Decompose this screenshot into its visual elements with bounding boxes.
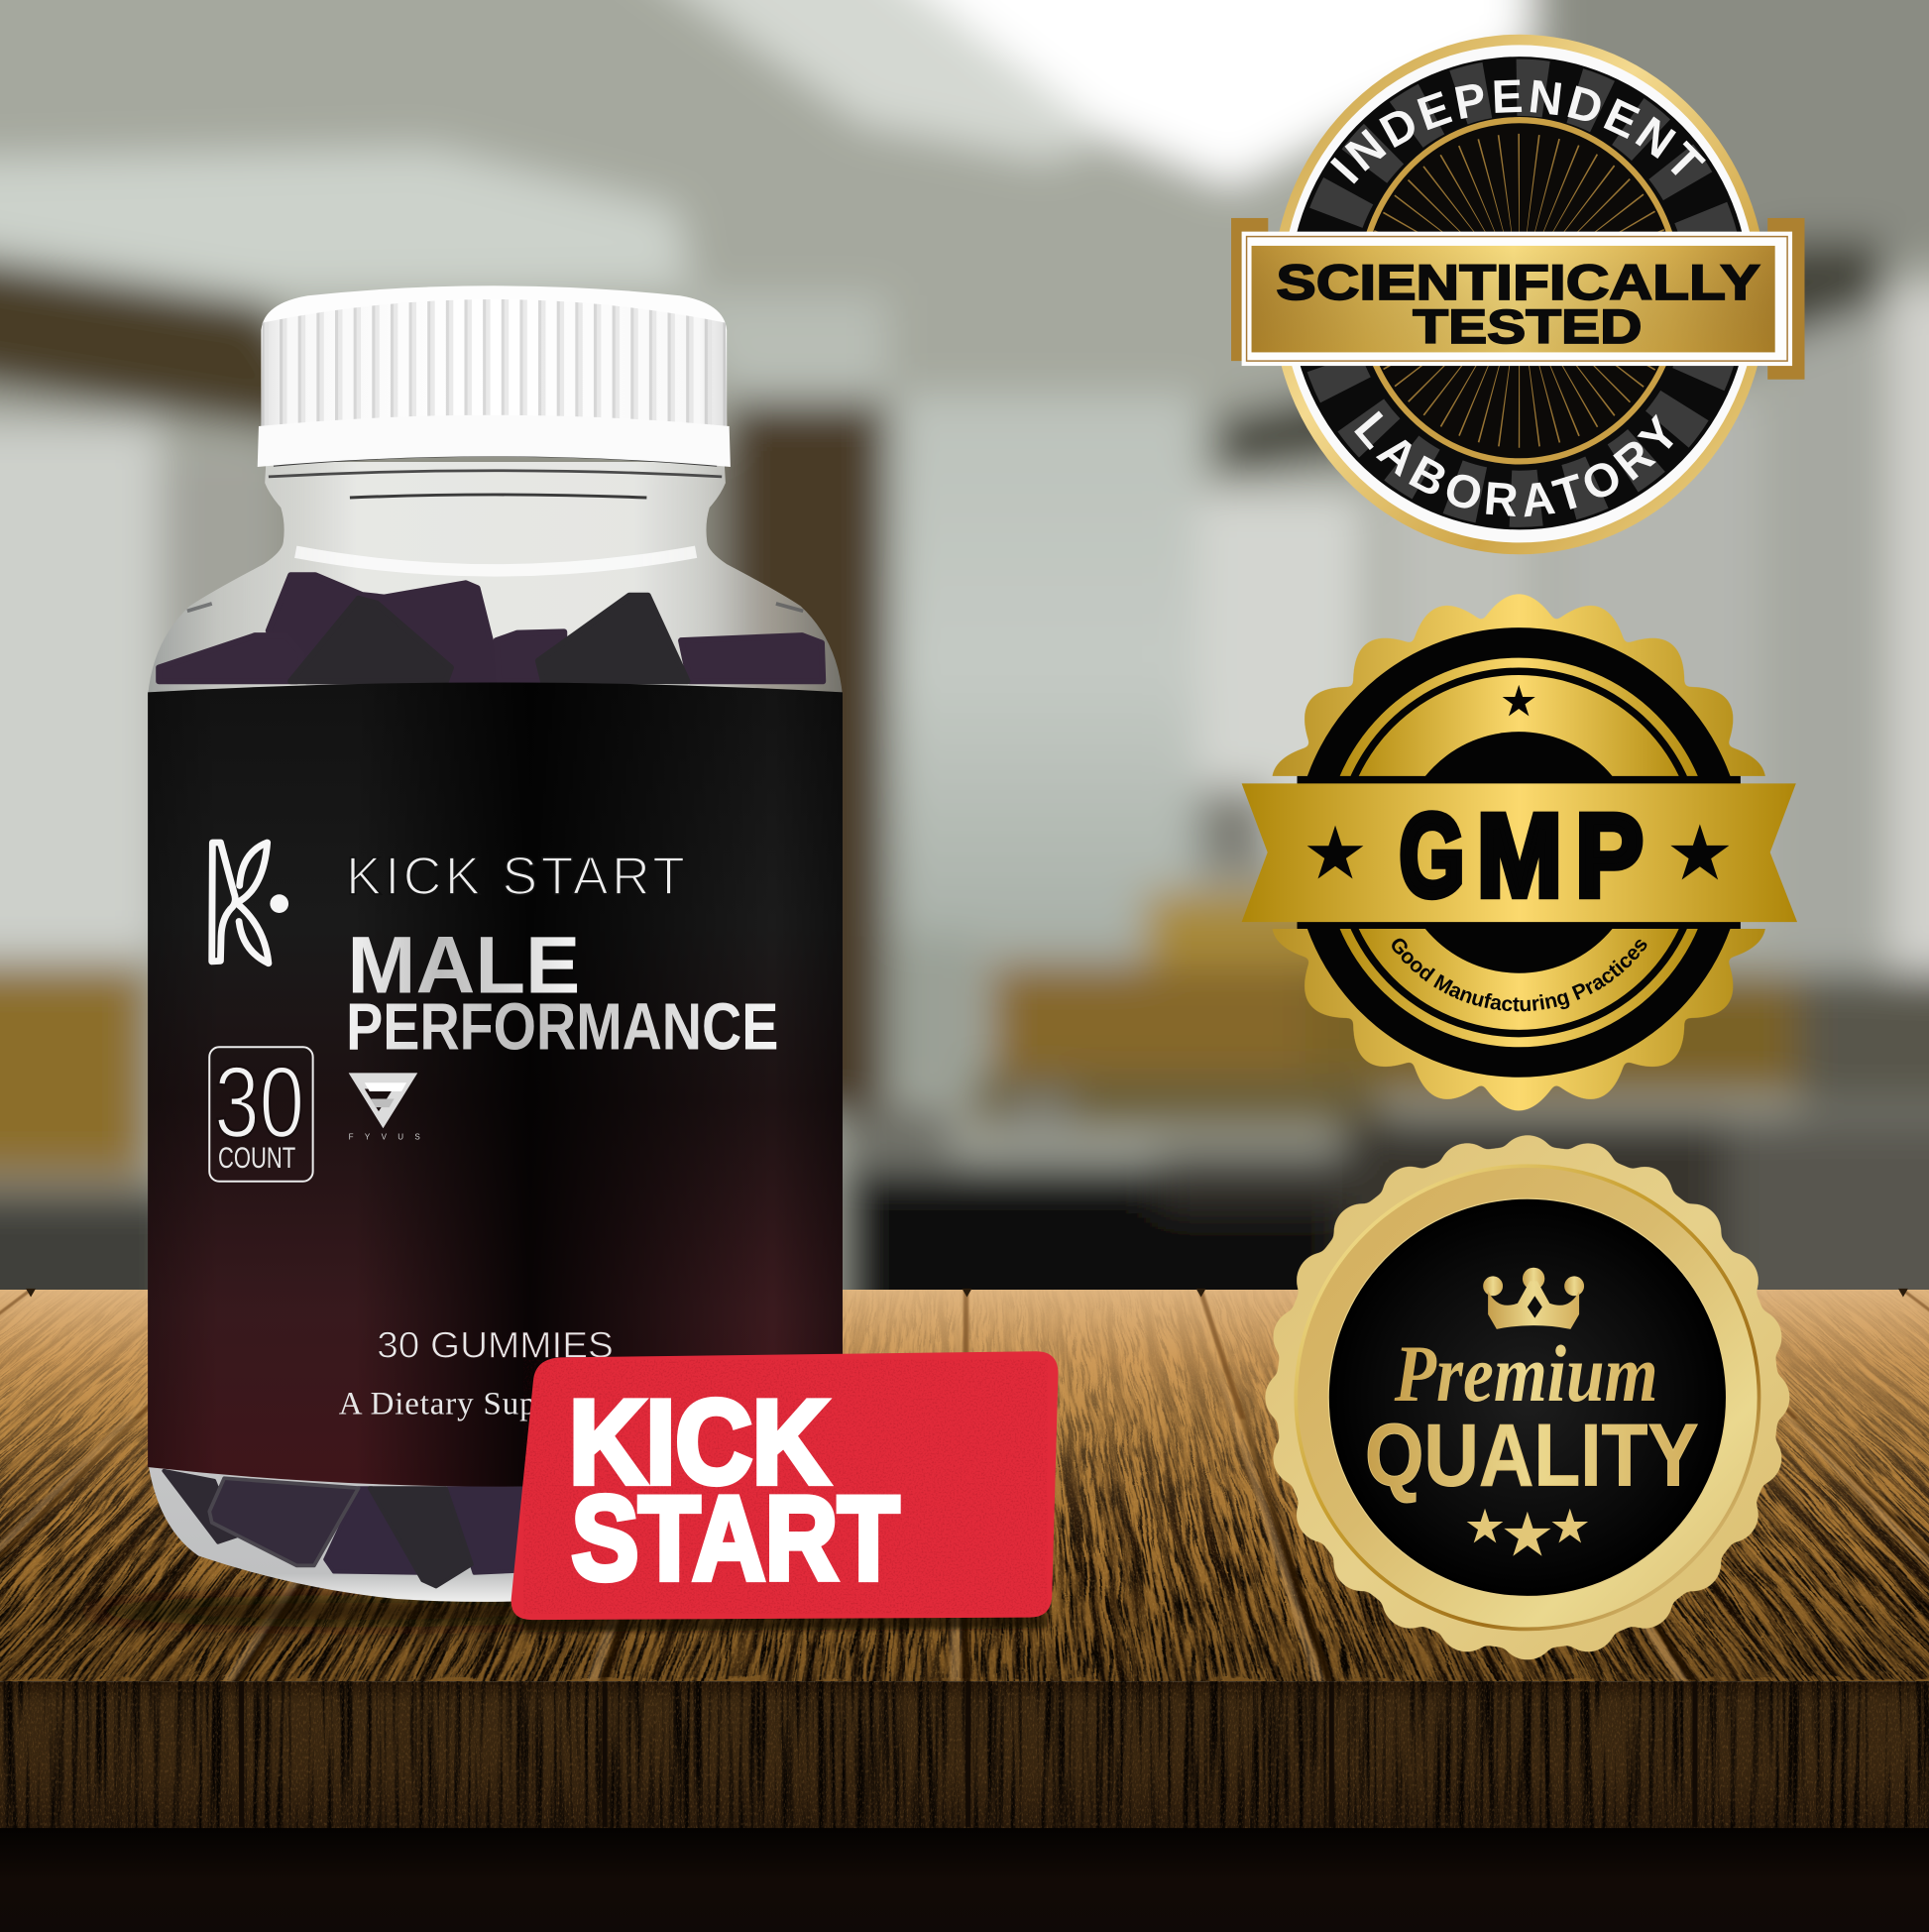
ribbon frame [1242, 232, 1792, 366]
scalloped gold edge [1265, 1135, 1790, 1659]
dietary supplement text: A Dietary Supplement [339, 1387, 648, 1422]
badge: GMP [1241, 594, 1797, 1110]
GMP letters: M [1477, 790, 1562, 921]
30 count box: COUNT [218, 1142, 295, 1175]
label title: Male: MALE [347, 921, 580, 1011]
ring text: Independent: INDEPENDENT [1330, 79, 1706, 184]
red Kick Start card [511, 1351, 1058, 1620]
dark spoked ring [1289, 57, 1750, 529]
left ribbon star [1307, 826, 1363, 879]
bottle shadow on table [74, 1595, 640, 1628]
inner sunburst oval [1357, 117, 1682, 464]
card text: Kick: KICK [569, 1377, 829, 1509]
GMP letters: P [1575, 790, 1644, 921]
script word: Premium: Premium [1394, 1328, 1658, 1419]
badge: scientifically tested [1231, 34, 1804, 555]
label title: Performance: PERFORMANCE [346, 990, 778, 1065]
right ribbon star [1670, 824, 1729, 880]
wooden table top in perspective [0, 1290, 1929, 1681]
top star [1503, 685, 1535, 716]
word: Quality: QUALITY [1365, 1406, 1699, 1505]
glass neck lines and highlights [187, 456, 803, 611]
black bars beside the ribbon [1298, 776, 1741, 929]
product bottle [148, 285, 843, 1602]
plank end notches at far table edge [26, 1289, 1908, 1298]
30 gummies text: 30 GUMMIES [377, 1323, 614, 1365]
right and left gold wings [1231, 218, 1804, 380]
gummies at top of bottle [159, 575, 823, 681]
shadow at table front of the top surface [0, 1539, 1929, 1681]
30 count box: 30 [214, 1046, 304, 1159]
crown icon [1483, 1268, 1584, 1329]
shadow under the table [0, 1828, 1929, 1932]
gold rim [1296, 1166, 1759, 1629]
dark label [148, 682, 843, 1487]
gold ribbon [1242, 783, 1797, 922]
gummies at bottom of bottle [164, 1471, 529, 1587]
scalloped gold seal [1273, 594, 1765, 1110]
card shadow [523, 1611, 1047, 1633]
brand logo K [212, 843, 288, 964]
card text: Start: START [572, 1473, 899, 1605]
Fyvus logo: FYVUS [349, 1132, 420, 1141]
bottom glass [148, 1461, 843, 1602]
ring text: Laboratory: LABORATORY [1354, 410, 1673, 517]
curved text: Good Manufacturing Practices: Good Manufacturing Practices [1392, 938, 1647, 1011]
label title: Kick Start: KICK START [346, 848, 685, 906]
table front edge [0, 1681, 1929, 1829]
badge: premium quality [1265, 1135, 1790, 1659]
ribbon text: Scientifically: SCIENTIFICALLY [1276, 255, 1760, 310]
Fyvus logo [349, 1073, 420, 1141]
outer oval ring [1272, 35, 1767, 554]
three stars [1467, 1509, 1588, 1556]
GMP letters [1400, 790, 1644, 921]
black and gold rings [1294, 627, 1744, 1078]
GMP letters: G [1400, 790, 1465, 921]
glass shoulder and neck [148, 462, 843, 696]
ribbon text: Tested: TESTED [1413, 300, 1642, 354]
black centre disc [1328, 1198, 1727, 1596]
white ribbed cap [258, 285, 731, 467]
